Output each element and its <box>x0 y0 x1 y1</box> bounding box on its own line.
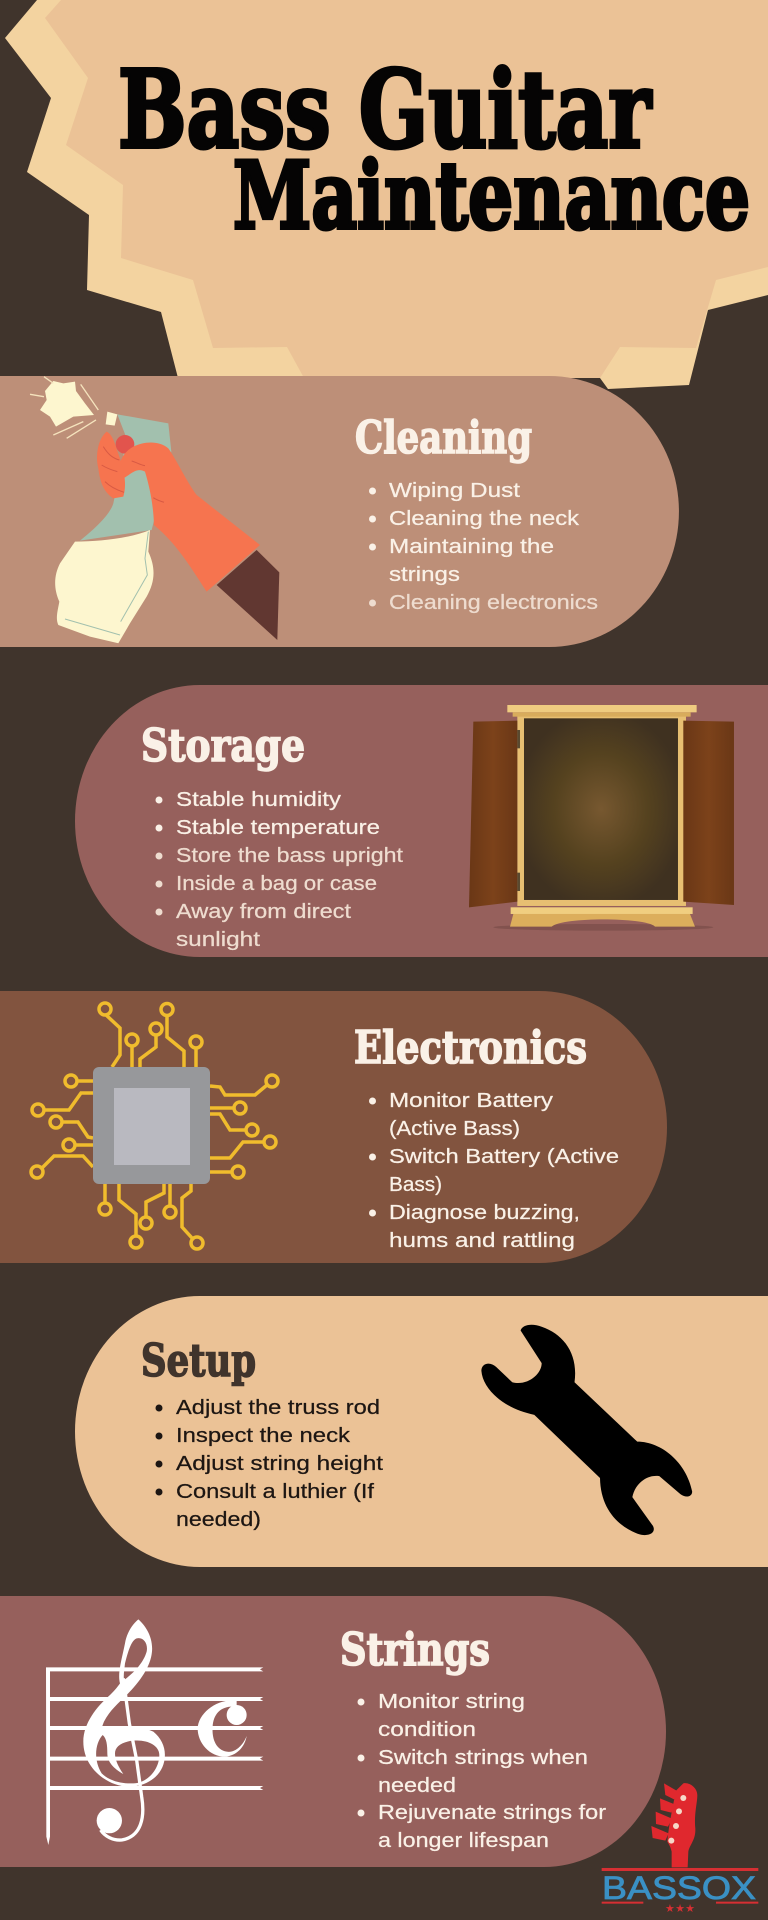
list: cleaning tips: Cleaning electronics <box>389 591 598 614</box>
title <box>118 48 750 250</box>
header badge <box>5 0 768 389</box>
list: electronics tips: Diagnose buzzing, <box>389 1201 580 1224</box>
list: setup tips: Consult a luthier (If <box>176 1480 374 1503</box>
list: electronics tips: Switch Battery (Active <box>389 1145 619 1168</box>
icon: wrench <box>481 1325 692 1535</box>
list: setup tips <box>156 1396 383 1531</box>
list: setup tips: Adjust string height <box>176 1452 383 1475</box>
list: setup tips: needed) <box>176 1508 261 1531</box>
list: storage tips: Inside a bag or case <box>176 872 377 895</box>
icon: spray bottle in gloved hand <box>30 377 279 643</box>
icon: circuit chip <box>31 1003 278 1249</box>
icon: open wooden cabinet <box>469 705 734 931</box>
list: strings tips: needed <box>378 1774 456 1797</box>
panel: strings <box>0 1596 666 1867</box>
icon: treble clef on staff <box>46 1619 263 1845</box>
list: cleaning tips: Cleaning the neck <box>389 507 580 530</box>
heading: Storage: Storage <box>141 719 305 772</box>
heading: Cleaning: Cleaning <box>355 411 532 464</box>
list: cleaning tips: Maintaining the <box>389 535 554 558</box>
logo: Bassox <box>602 1783 758 1915</box>
list: strings tips <box>358 1690 606 1852</box>
panel: setup <box>75 1296 768 1567</box>
list: storage tips <box>156 788 403 951</box>
heading: Setup: Setup <box>141 1334 256 1387</box>
list: cleaning tips: Wiping Dust <box>389 479 520 502</box>
list: strings tips: condition <box>378 1718 476 1741</box>
list: electronics tips: hums and rattling <box>389 1229 575 1252</box>
list: setup tips: Inspect the neck <box>176 1424 351 1447</box>
list: storage tips: Stable humidity <box>176 788 342 811</box>
list: storage tips: Stable temperature <box>176 816 380 839</box>
list: cleaning tips <box>369 479 598 614</box>
heading: Electronics: Electronics <box>354 1021 587 1074</box>
list: storage tips: sunlight <box>176 928 260 951</box>
list: strings tips: Rejuvenate strings for <box>378 1801 606 1824</box>
list: strings tips: a longer lifespan <box>378 1829 549 1852</box>
list: electronics tips: Bass) <box>389 1173 442 1196</box>
panel: storage <box>75 685 768 957</box>
list: storage tips: Store the bass upright <box>176 844 403 867</box>
list: storage tips: Away from direct <box>176 900 351 923</box>
panel: cleaning <box>0 376 679 647</box>
list: strings tips: Monitor string <box>378 1690 525 1713</box>
list: cleaning tips: strings <box>389 563 460 586</box>
logo stars: ★★★ <box>665 1902 695 1915</box>
heading: Strings: Strings <box>340 1623 490 1676</box>
logo wordmark: BASSOX <box>602 1870 756 1906</box>
icon: bass headstock <box>602 1783 758 1904</box>
list: setup tips: Adjust the truss rod <box>176 1396 380 1419</box>
panel: electronics <box>0 991 667 1263</box>
list: electronics tips <box>369 1089 619 1252</box>
list: strings tips: Switch strings when <box>378 1746 588 1769</box>
list: electronics tips: Monitor Battery <box>389 1089 554 1112</box>
list: electronics tips: (Active Bass) <box>389 1117 520 1140</box>
